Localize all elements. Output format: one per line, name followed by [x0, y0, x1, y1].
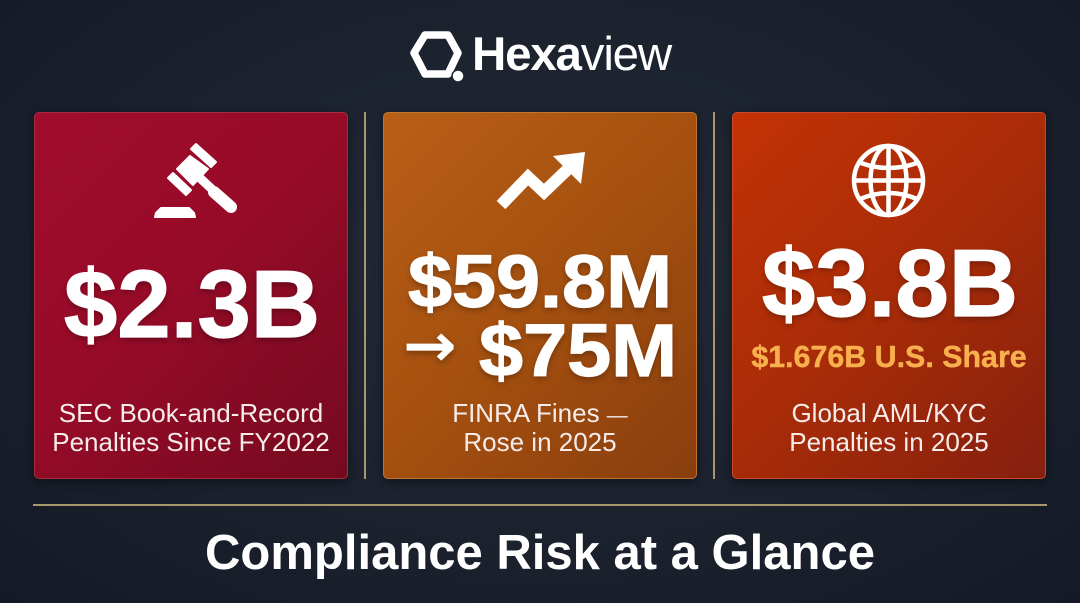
icon: hexagon logo mark [410, 31, 464, 82]
panel: SEC penalties [34, 112, 348, 479]
stat value: $59.8M [408, 240, 672, 323]
stat value: → $75M [403, 309, 677, 392]
logo: Hexaview [410, 28, 672, 82]
caption [52, 398, 330, 457]
icon: gavel [154, 143, 237, 218]
stat value [403, 240, 677, 392]
title: Compliance Risk at a Glance [205, 526, 875, 580]
icon: rising arrow [496, 152, 585, 210]
stat value: $2.3B [64, 251, 320, 358]
caption [452, 398, 628, 457]
logo wordmark: Hexaview [472, 28, 671, 81]
caption: Global AML/KYC [791, 398, 987, 428]
caption [789, 398, 989, 457]
caption: SEC Book-and-Record [59, 398, 323, 428]
icon: globe [852, 144, 926, 218]
stat value: $3.8B [762, 230, 1018, 337]
caption: Penalties in 2025 [789, 427, 989, 457]
caption: FINRA Fines — [452, 398, 628, 428]
caption: Rose in 2025 [463, 427, 617, 457]
divider left [364, 112, 366, 479]
horizontal rule [33, 504, 1047, 506]
sub-stat: U.S. share: $1.676B U.S. Share [751, 340, 1027, 374]
panel: AML/KYC penalties [732, 112, 1046, 479]
caption: Penalties Since FY2022 [52, 427, 330, 457]
panel: FINRA fines [383, 112, 697, 479]
divider right [713, 112, 715, 479]
